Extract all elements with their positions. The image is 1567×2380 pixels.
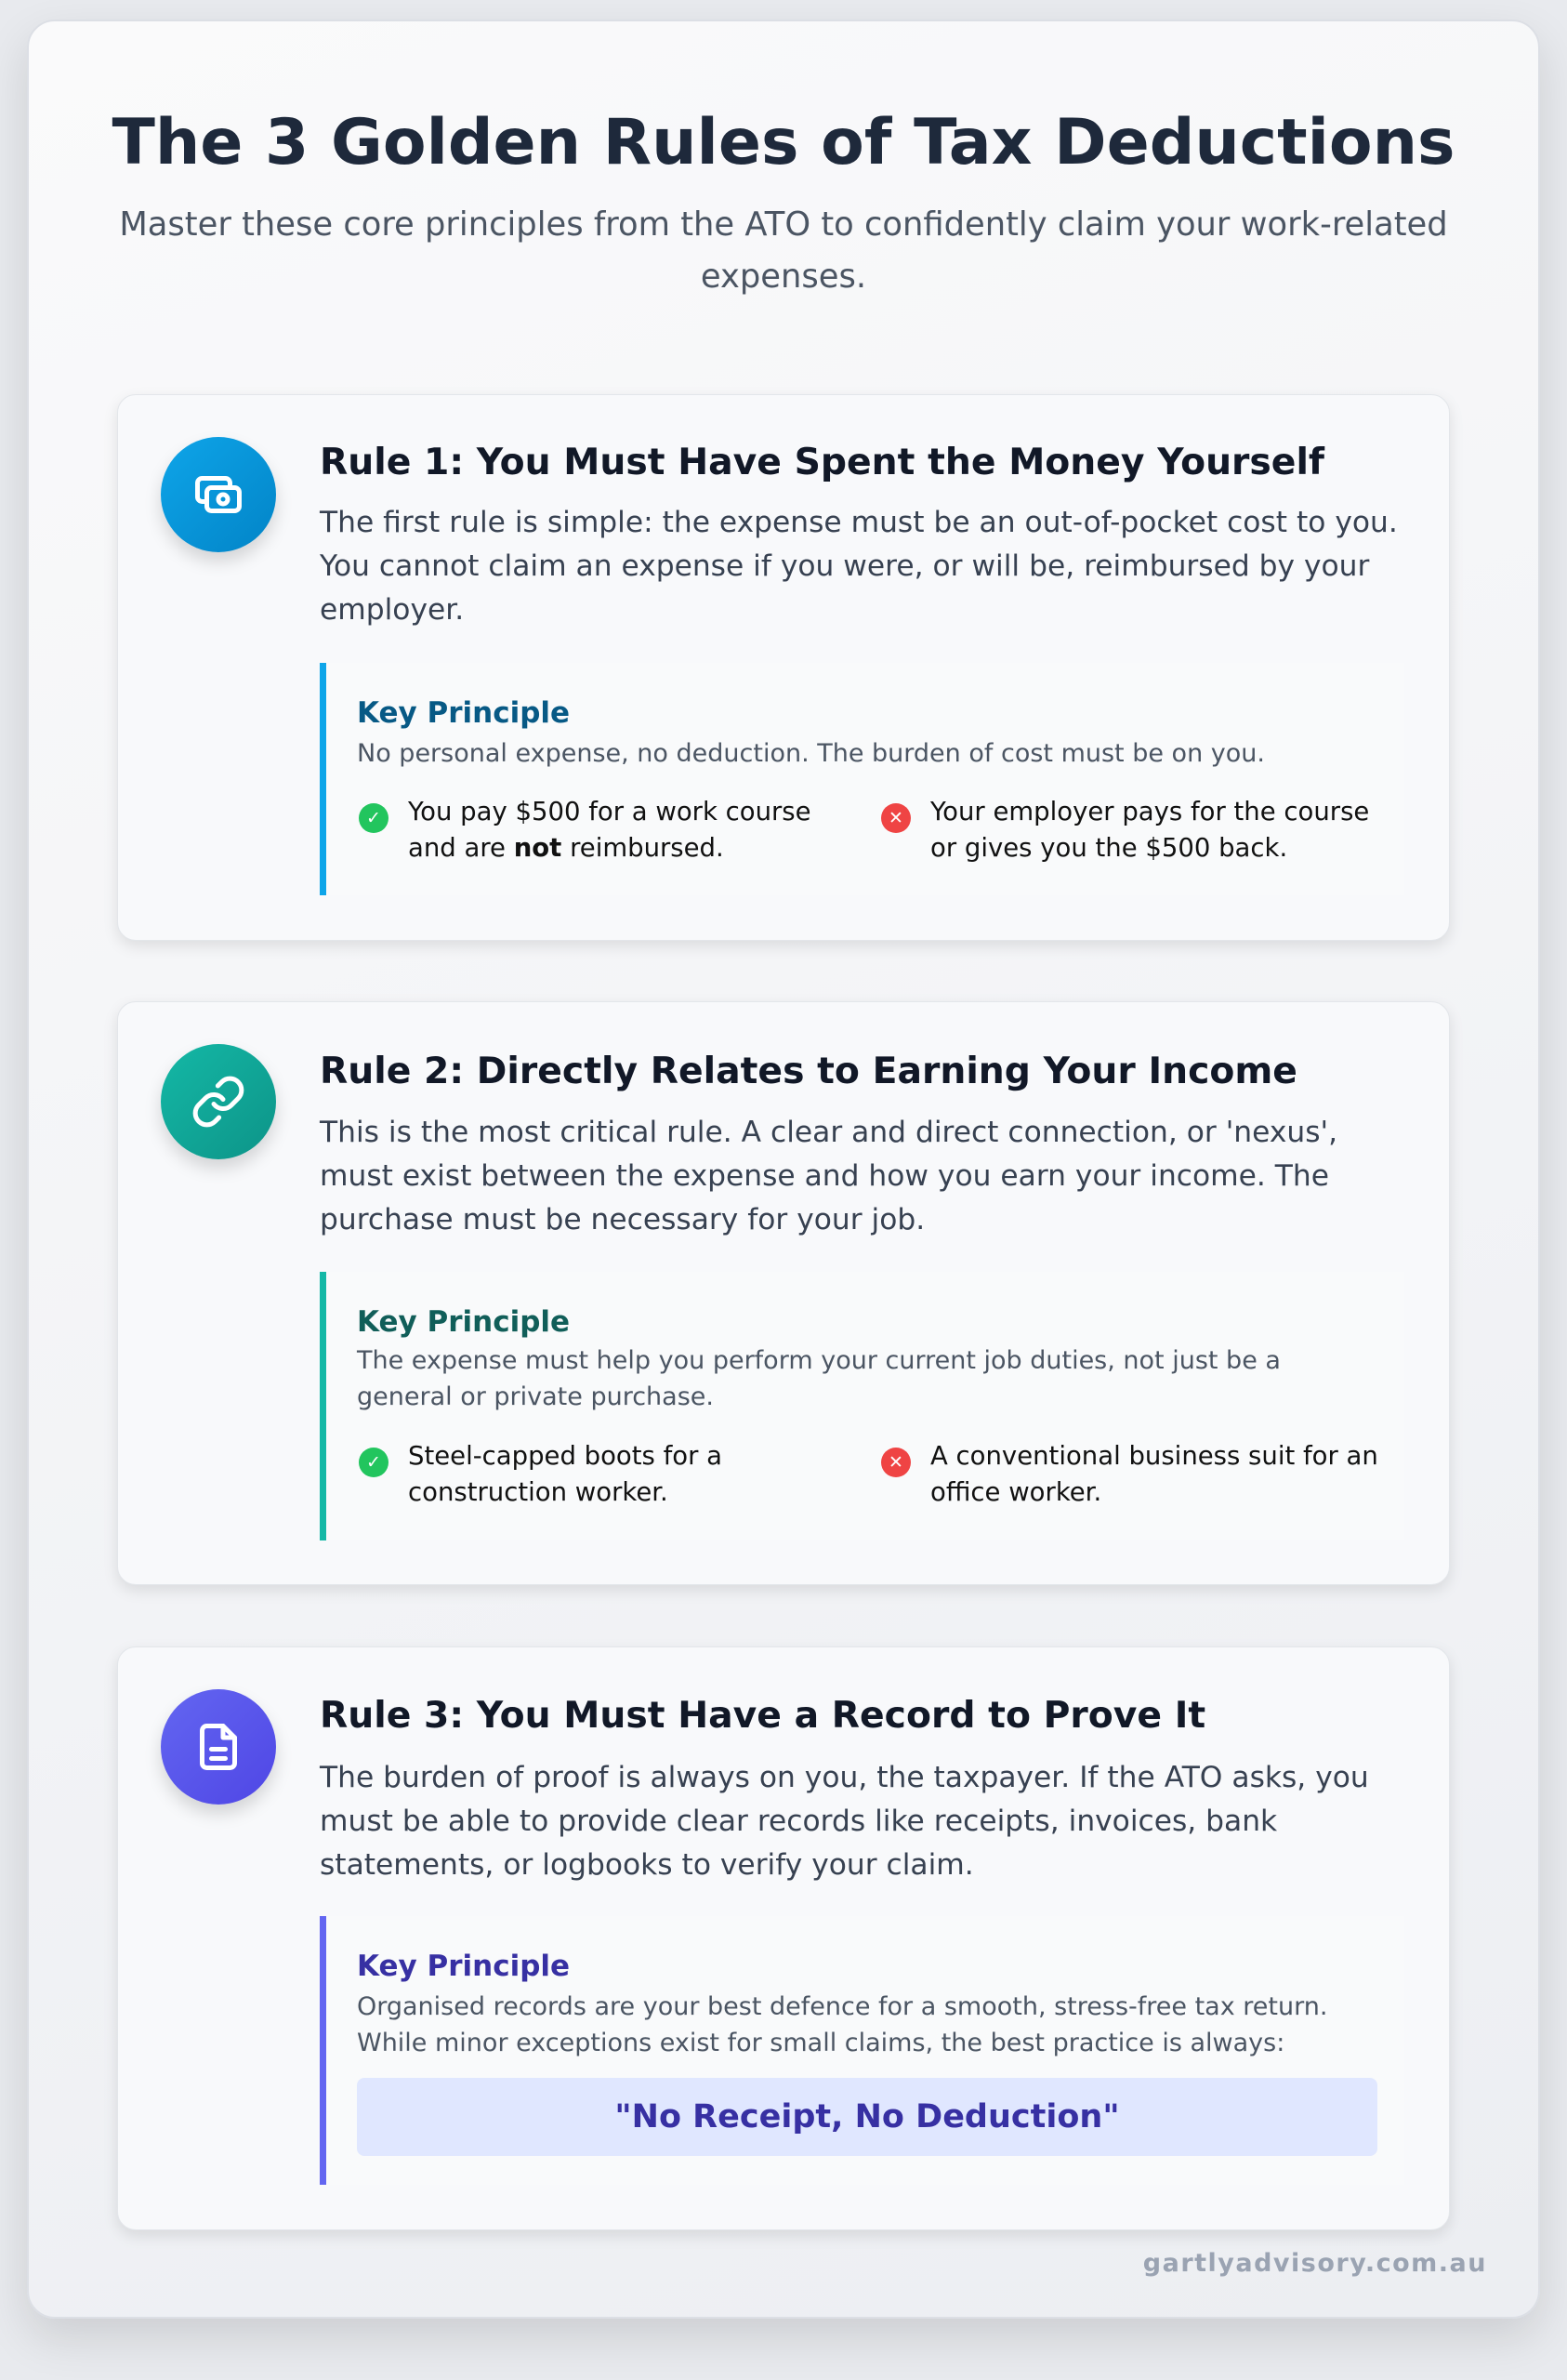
text: rule 3 body — [320, 1761, 1369, 1882]
desc 2: The expense must help you perform your current job duties, not just be a — [357, 1346, 1281, 1375]
example: no 2: A conventional business suit for an — [930, 1441, 1378, 1471]
text: rule 3 body: The burden of proof is always on you, the taxpayer. If the ATO asks, you — [320, 1761, 1369, 1794]
subtitle — [119, 205, 1448, 296]
text: rule 2 body: purchase must be necessary for your job. — [320, 1203, 925, 1236]
text: rule 3 body: must be able to provide clear records like receipts, invoices, bank — [320, 1805, 1277, 1838]
example: no 1 — [881, 797, 1369, 863]
desc 2 — [357, 1346, 1281, 1411]
panel: rule 2 — [117, 1001, 1450, 1585]
panel: rule 1 — [117, 394, 1450, 941]
desc 3: Organised records are your best defence for a smooth, stress-free tax return. — [357, 1992, 1327, 2021]
subtitle: expenses. — [701, 258, 866, 296]
desc 2: general or private purchase. — [357, 1382, 714, 1411]
desc 1: No personal expense, no deduction. The burden of cost must be on you. — [357, 739, 1265, 768]
icon: money — [161, 437, 276, 552]
desc 3: While minor exceptions exist for small claims, the best practice is always: — [357, 2029, 1284, 2057]
example: yes 1: and are not reimbursed. — [408, 833, 724, 863]
callout: quote: "No Receipt, No Deduction" — [614, 2098, 1120, 2135]
example: no 2: office worker. — [930, 1477, 1101, 1507]
icon: document — [161, 1689, 276, 1805]
icon: link — [161, 1044, 276, 1159]
heading: rule 1: Rule 1: You Must Have Spent the Money Yourself — [320, 442, 1324, 483]
subtitle: Master these core principles from the ATO to confidently claim your work-related — [119, 205, 1448, 244]
example: yes 1 — [359, 797, 811, 863]
text: rule 1 body: You cannot claim an expense if you were, or will be, reimbursed by your — [320, 549, 1369, 583]
text: rule 1 body — [320, 506, 1398, 627]
panel: rule 3 — [117, 1646, 1450, 2230]
example: no 2: ✕ — [889, 1452, 903, 1473]
text: rule 3 body: statements, or logbooks to verify your claim. — [320, 1848, 974, 1882]
example: yes 1: ✓ — [366, 808, 381, 828]
example: no 1: ✕ — [889, 808, 903, 828]
example: yes 2: construction worker. — [408, 1477, 668, 1507]
example: no 1: Your employer pays for the course — [930, 797, 1369, 826]
text: rule 2 body — [320, 1116, 1337, 1236]
desc 3 — [357, 1992, 1327, 2057]
example: yes 2: ✓ — [366, 1452, 381, 1473]
example: yes 1: You pay $500 for a work course — [408, 797, 811, 826]
example: yes 2: Steel-capped boots for a — [408, 1441, 722, 1471]
label 3: Key Principle — [357, 1950, 570, 1983]
heading: rule 3: Rule 3: You Must Have a Record to Prove It — [320, 1695, 1205, 1737]
label 1: Key Principle — [357, 696, 570, 730]
text: rule 2 body: This is the most critical rule. A clear and direct connection, or 'nexus', — [320, 1116, 1337, 1149]
heading: rule 2: Rule 2: Directly Relates to Earning Your Income — [320, 1051, 1297, 1092]
footer: gartlyadvisory.com.au — [1143, 2249, 1487, 2278]
key principle box 3 — [320, 1916, 1404, 2185]
text: rule 1 body: The first rule is simple: the expense must be an out-of-pocket cost to you. — [320, 506, 1398, 539]
title: The 3 Golden Rules of Tax Deductions — [112, 106, 1455, 179]
text: rule 1 body: employer. — [320, 593, 464, 627]
example: no 2 — [881, 1441, 1378, 1507]
example: no 1: or gives you the $500 back. — [930, 833, 1287, 863]
example: yes 2 — [359, 1441, 722, 1507]
text: rule 2 body: must exist between the expense and how you earn your income. The — [320, 1159, 1329, 1193]
label 2: Key Principle — [357, 1305, 570, 1339]
callout: quote — [357, 2078, 1377, 2156]
key principle box 1 — [320, 663, 1404, 895]
key principle box 2 — [320, 1272, 1404, 1540]
